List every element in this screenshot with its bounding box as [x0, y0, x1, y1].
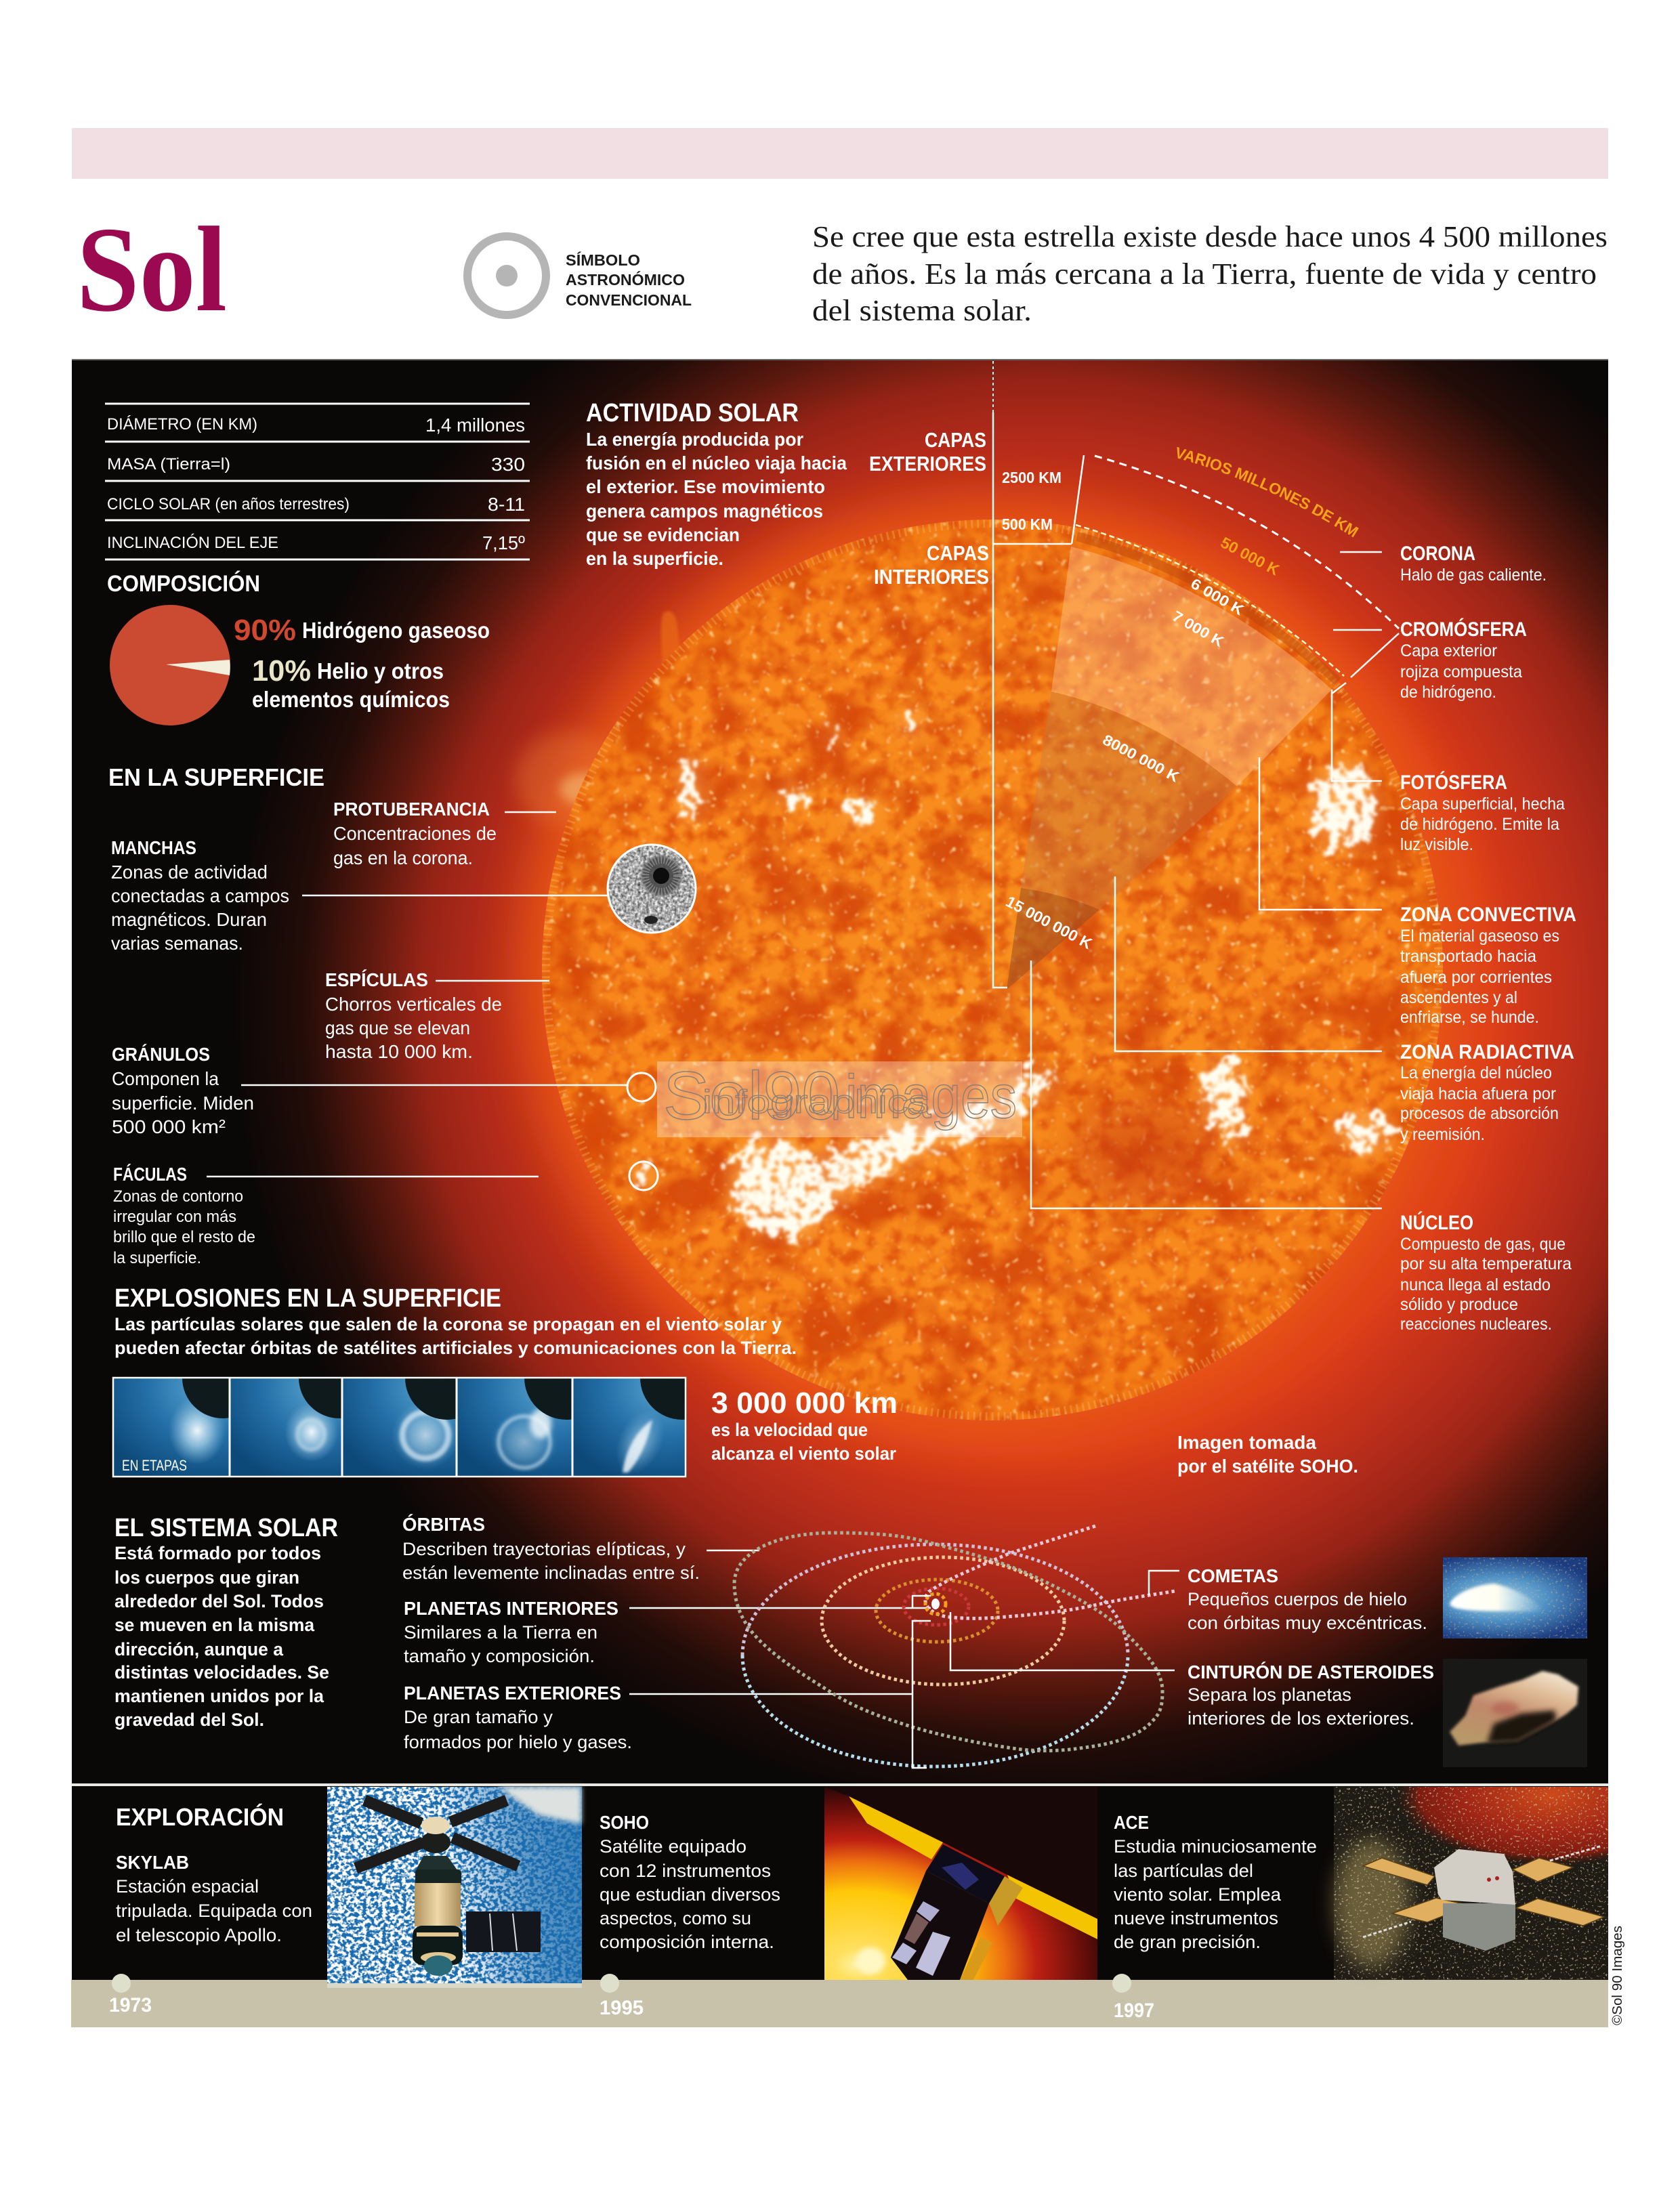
label: nucleo: Compuesto de gas, que [1400, 1235, 1566, 1254]
label: orbitas: están levemente inclinadas entre sí. [402, 1563, 700, 1583]
icon: astronomical sun symbol [467, 236, 546, 315]
timeline dot and year: 1973 [109, 1974, 152, 2016]
limb spicules [545, 523, 1440, 1417]
solar system text: gravedad del Sol. [114, 1710, 264, 1730]
layers labels: CAPAS [925, 428, 986, 452]
solar system text: alrededor del Sol. Todos [114, 1591, 324, 1611]
solar system text: se mueven en la misma [114, 1615, 315, 1635]
label: nucleo: por su alta temperatura [1400, 1254, 1572, 1273]
layers axis lines [993, 361, 1399, 988]
surface heading: EN LA SUPERFICIE [108, 763, 324, 791]
label: zona convectiva: transportado hacia [1400, 947, 1536, 966]
title: Sol [77, 202, 227, 337]
watermark: images [845, 1063, 1017, 1131]
sun cross-section wedges [1007, 536, 1338, 990]
copyright: ©Sol 90 Images [1610, 1926, 1625, 2025]
label: fotosfera: de hidrógeno. Emite la [1400, 815, 1559, 834]
text: SOHO: con 12 instrumentos [600, 1861, 771, 1881]
solar system orbit diagram [734, 1526, 1175, 1767]
symbol caption: ASTRONÓMICO [566, 270, 685, 289]
label: cromosfera: CROMÓSFERA [1400, 618, 1527, 641]
image credit: por el satélite SOHO. [1177, 1456, 1358, 1477]
intro text: de años. Es la más cercana a la Tierra, fuente de vida y centro [812, 257, 1597, 291]
label: faculas: irregular con más [113, 1208, 236, 1226]
label: cometas: con órbitas muy excéntricas. [1188, 1613, 1427, 1633]
text: Skylab: SKYLAB [116, 1852, 189, 1873]
label: zona convectiva: ZONA CONVECTIVA [1400, 904, 1576, 926]
label: zona radiactiva: procesos de absorción [1400, 1104, 1559, 1123]
label: corona: CORONA [1400, 543, 1475, 565]
explosions text: EXPLOSIONES EN LA SUPERFICIE [114, 1284, 501, 1313]
temperatures and distances on the wedge: 50 000 K [1218, 533, 1282, 579]
text: ACE: de gran precisión. [1114, 1932, 1261, 1952]
label: orbitas: ÓRBITAS [402, 1514, 485, 1535]
stats table: MASA (Tierra=l) [107, 455, 230, 473]
label: nucleo: nunca llega al estado [1400, 1275, 1551, 1294]
top pink band [72, 128, 1608, 179]
pie legend: 90% [234, 614, 296, 647]
solar wind speed: 3 000 000 km [711, 1387, 898, 1420]
label: corona [1400, 543, 1547, 585]
symbol caption: SÍMBOLO [566, 251, 640, 269]
label: faculas: FÁCULAS [113, 1164, 187, 1185]
label: granulos: GRÁNULOS [112, 1044, 210, 1065]
layers labels: CAPAS [927, 541, 989, 565]
temperatures and distances on the wedge [1003, 447, 1359, 952]
label: orbitas [402, 1514, 759, 1583]
temperatures and distances on the wedge: VARIOS MILLONES DE KM [1177, 447, 1359, 538]
pie legend: 10% [252, 654, 311, 688]
photo strip: coronal ejection stages: EN ETAPAS [122, 1457, 187, 1474]
sun in the orbit diagram [931, 1599, 940, 1609]
label: cromosfera [1400, 618, 1527, 702]
label: zona convectiva [1400, 904, 1576, 1027]
watermark: infographics [702, 1084, 929, 1120]
temperatures and distances on the wedge: 6 000 K [1188, 575, 1247, 618]
text: SOHO: SOHO [600, 1812, 649, 1833]
sun disc [535, 515, 1450, 1429]
label: zona convectiva: enfriarse, se hunde. [1400, 1008, 1539, 1027]
watermark [657, 1058, 1022, 1137]
text: ACE: nueve instrumentos [1114, 1908, 1278, 1928]
pie legend [234, 614, 490, 712]
label: fotosfera [1400, 771, 1565, 854]
label: granulos: superficie. Miden [112, 1093, 254, 1114]
label: zona radiactiva: y reemisión. [1400, 1125, 1485, 1144]
solar activity text: ACTIVIDAD SOLAR [586, 399, 799, 427]
intro text [812, 220, 1608, 327]
image credit: Imagen tomada [1177, 1432, 1316, 1453]
temperatures and distances on the wedge: 8000 000 K [1100, 731, 1182, 786]
layers labels: INTERIORES [874, 565, 989, 589]
solar wind speed [711, 1387, 898, 1464]
asteroid photo [1443, 1659, 1587, 1767]
temperatures and distances on the wedge: 7 000 K [1169, 608, 1227, 650]
label: faculas [113, 1162, 658, 1267]
label: zona convectiva: ascendentes y al [1400, 988, 1517, 1007]
label: planetas interiores [404, 1598, 931, 1666]
orbit leader lines [912, 1571, 1179, 1768]
label: cometas [1188, 1565, 1427, 1633]
panel: main sun panel [72, 359, 1608, 1783]
solar wind speed: alcanza el viento solar [711, 1443, 896, 1464]
label: nucleo: sólido y produce [1400, 1295, 1518, 1314]
photo: SOHO satellite [824, 1787, 1097, 1980]
label: manchas: varias semanas. [111, 933, 243, 954]
text: Skylab [116, 1852, 312, 1945]
divider band [72, 1783, 1608, 1786]
text: ACE: las partículas del [1114, 1861, 1253, 1881]
layers labels: 500 KM [1002, 515, 1053, 533]
text: SOHO: que estudian diversos [600, 1884, 780, 1905]
intro text: del sistema solar. [812, 294, 1032, 327]
timeline dot and year: 1995: 1995 [600, 1997, 644, 2019]
pie chart [110, 605, 230, 725]
label: granulos: Componen la [112, 1068, 219, 1089]
timeline dot and year: 1997: 1997 [1114, 2000, 1154, 2022]
stats table: DIÁMETRO (EN KM) [107, 415, 257, 433]
label: faculas: la superficie. [113, 1249, 201, 1267]
label: planetas interiores: PLANETAS INTERIORES [404, 1598, 618, 1619]
label: zona radiactiva: viaja hacia afuera por [1400, 1084, 1556, 1103]
label: planetas exteriores: formados por hielo y gases. [404, 1732, 632, 1752]
label: faculas: Zonas de contorno [113, 1187, 243, 1206]
explosions text: pueden afectar órbitas de satélites artificiales y comunicaciones con la Tierra. [114, 1338, 797, 1358]
solar system text [114, 1514, 338, 1730]
solar activity text: fusión en el núcleo viaja hacia [586, 452, 847, 473]
layers labels: EXTERIORES [869, 452, 986, 475]
callout lines right [1031, 552, 1382, 1208]
label: manchas: Zonas de actividad [111, 862, 268, 883]
timeline dot and year: 1997 [1112, 1974, 1154, 2022]
label: cinturon de asteroides: CINTURÓN DE ASTEROIDES [1188, 1662, 1434, 1683]
pie legend: Helio y otros [317, 658, 444, 683]
pie legend: Hidrógeno gaseoso [302, 618, 490, 643]
label: cromosfera: de hidrógeno. [1400, 683, 1496, 702]
label: manchas: conectadas a campos [111, 885, 289, 906]
label: fotosfera: FOTÓSFERA [1400, 771, 1507, 794]
comet photo [1443, 1557, 1587, 1638]
panel: exploration [71, 1786, 1608, 2027]
label: manchas [111, 837, 608, 954]
label: nucleo [1400, 1211, 1572, 1334]
dark region [1070, 1097, 1219, 1206]
explosions text: Las partículas solares que salen de la corona se propagan en el viento solar y [114, 1314, 782, 1334]
label: planetas exteriores: PLANETAS EXTERIORES [404, 1683, 621, 1704]
label: planetas exteriores [404, 1683, 912, 1752]
label: manchas: MANCHAS [111, 837, 196, 858]
solar system text: mantienen unidos por la [114, 1686, 324, 1706]
text: Skylab: Estación espacial [116, 1876, 259, 1897]
timeline dot and year: 1995 [600, 1974, 644, 2019]
label: protuberancia: Concentraciones de [333, 823, 497, 844]
solar activity text: en la superficie. [586, 548, 723, 569]
label: planetas interiores: Similares a la Tierra en [404, 1622, 597, 1643]
solar activity text: genera campos magnéticos [586, 501, 823, 522]
composition heading: COMPOSICIÓN [107, 571, 260, 597]
label: corona: Halo de gas caliente. [1400, 566, 1547, 585]
stats table: 1,4 millones [425, 415, 525, 436]
label: zona radiactiva: La energía del núcleo [1400, 1063, 1552, 1082]
label: cromosfera: rojiza compuesta [1400, 662, 1522, 681]
label: granulos: 500 000 km² [112, 1116, 226, 1137]
label: zona radiactiva: ZONA RADIACTIVA [1400, 1041, 1574, 1063]
text: Skylab: el telescopio Apollo. [116, 1925, 282, 1945]
text: ACE: ACE [1114, 1812, 1149, 1833]
label: cromosfera: Capa exterior [1400, 641, 1497, 660]
label: granulos [112, 1044, 656, 1137]
temperatures and distances on the wedge: 15 000 000 K [1003, 892, 1095, 952]
prominence [660, 610, 680, 663]
photo strip: coronal ejection stages [113, 1336, 724, 1482]
label: planetas exteriores: De gran tamaño y [404, 1707, 553, 1727]
solar system text: distintas velocidades. Se [114, 1662, 329, 1683]
pie legend: elementos químicos [252, 687, 450, 712]
layers labels: 2500 KM [1002, 469, 1062, 486]
label: nucleo: reacciones nucleares. [1400, 1315, 1552, 1334]
label: protuberancia [333, 799, 556, 868]
layers labels [869, 428, 1062, 589]
label: zona convectiva: El material gaseoso es [1400, 927, 1559, 946]
sun halo [522, 499, 1463, 1441]
solar activity text: que se evidencian [586, 524, 740, 545]
label: cinturon de asteroides: Separa los planetas [1188, 1685, 1351, 1705]
photo: ACE satellite [1334, 1787, 1608, 1980]
timeline dot and year: 1973: 1973 [109, 1994, 152, 2016]
label: espiculas: ESPÍCULAS [325, 969, 428, 990]
stats table: 7,15º [482, 532, 525, 553]
solar system text: Está formado por todos [114, 1543, 321, 1563]
flare at the limb [555, 768, 589, 809]
label: espiculas: hasta 10 000 km. [325, 1041, 473, 1062]
solar system text: EL SISTEMA SOLAR [114, 1514, 338, 1542]
symbol caption: CONVENCIONAL [566, 291, 692, 309]
exploration heading: EXPLORACIÓN [116, 1802, 284, 1831]
label: espiculas: Chorros verticales de [325, 994, 502, 1015]
label: cinturon de asteroides: interiores de los exteriores. [1188, 1708, 1414, 1729]
label: planetas interiores: tamaño y composición. [404, 1646, 595, 1666]
label: faculas: brillo que el resto de [113, 1228, 255, 1246]
symbol caption [566, 251, 692, 309]
text: ACE: Estudia minuciosamente [1114, 1836, 1317, 1857]
label: cometas: COMETAS [1188, 1565, 1278, 1586]
plage halo [634, 711, 1389, 1240]
sunspot photo [607, 844, 696, 933]
text: ACE: viento solar. Emplea [1114, 1884, 1282, 1905]
solar system text: los cuerpos que giran [114, 1567, 299, 1588]
stats table: 8-11 [488, 494, 525, 515]
bright plages [634, 711, 1389, 1240]
label: manchas: magnéticos. Duran [111, 909, 267, 930]
label: nucleo: NÚCLEO [1400, 1211, 1473, 1234]
stats table: CICLO SOLAR (en años terrestres) [107, 495, 350, 513]
watermark: Sol90 [663, 1058, 840, 1134]
solar activity text [586, 399, 847, 569]
label: espiculas [325, 969, 549, 1062]
stats table [105, 404, 530, 559]
solar wind speed: es la velocidad que [711, 1420, 868, 1440]
text: SOHO: composición interna. [600, 1932, 774, 1952]
label: cometas: Pequeños cuerpos de hielo [1188, 1589, 1407, 1609]
photo: Skylab [327, 1787, 582, 1988]
stats table: INCLINACIÓN DEL EJE [107, 534, 278, 552]
intro text: Se cree que esta estrella existe desde hace unos 4 500 millones [812, 220, 1608, 253]
label: cinturon de asteroides [1188, 1662, 1434, 1729]
image credit [1177, 1432, 1358, 1477]
label: espiculas: gas que se elevan [325, 1017, 470, 1038]
label: zona radiactiva [1400, 1041, 1574, 1144]
text: Skylab: tripulada. Equipada con [116, 1901, 312, 1921]
text: ACE [1114, 1812, 1317, 1952]
solar activity text: el exterior. Ese movimiento [586, 476, 825, 497]
text: SOHO: Satélite equipado [600, 1836, 747, 1857]
stats table: 330 [491, 454, 525, 475]
solar system text: dirección, aunque a [114, 1639, 284, 1659]
text: SOHO [600, 1812, 780, 1952]
text: SOHO: aspectos, como su [600, 1908, 751, 1928]
label: fotosfera: Capa superficial, hecha [1400, 795, 1565, 813]
solar activity text: La energía producida por [586, 429, 803, 450]
label: orbitas: Describen trayectorias elípticas, y [402, 1539, 686, 1559]
explosions text [114, 1284, 797, 1358]
label: protuberancia: PROTUBERANCIA [333, 799, 490, 820]
label: fotosfera: luz visible. [1400, 835, 1473, 854]
label: zona convectiva: afuera por corrientes [1400, 968, 1552, 987]
label: protuberancia: gas en la corona. [333, 847, 473, 868]
